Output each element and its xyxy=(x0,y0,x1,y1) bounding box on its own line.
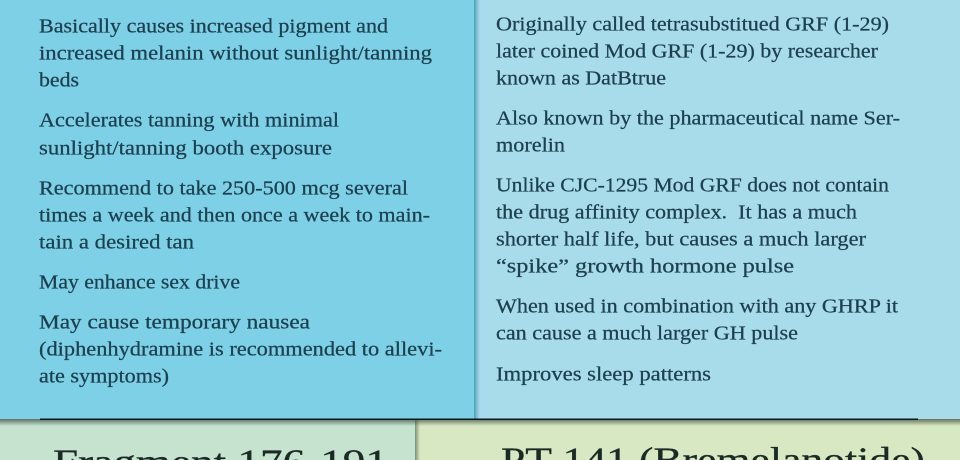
text block: Melanotan facts xyxy=(39,16,442,388)
text block: Mod GRF facts: Also known by the pharmaceutical name Ser- xyxy=(496,108,900,130)
panel: Mod GRF (1-29) xyxy=(476,0,960,419)
text block: Melanotan facts: increased melanin without sunlight/tanning xyxy=(39,44,432,64)
text block: Melanotan facts: Recommend to take 250-500 mcg several xyxy=(39,178,409,200)
text block: Mod GRF facts: later coined Mod GRF (1-29) by researcher xyxy=(496,42,879,62)
panel: Melanotan xyxy=(0,0,480,419)
text block: Melanotan facts: May cause temporary nausea xyxy=(39,312,310,334)
text block: Mod GRF facts: the drug affinity complex. It has a much xyxy=(496,202,857,224)
text block: Mod GRF facts xyxy=(496,14,900,386)
text block: Mod GRF facts: shorter half life, but causes a much larger xyxy=(496,230,867,250)
text block: Melanotan facts: Basically causes increased pigment and xyxy=(39,16,388,38)
text block: Mod GRF facts: known as DatBtrue xyxy=(496,68,666,90)
text block: Melanotan facts: (diphenhydramine is recommended to allevi- xyxy=(39,340,442,360)
text block: Mod GRF facts: Improves sleep patterns xyxy=(496,364,711,386)
text block: Melanotan facts: Accelerates tanning with minimal xyxy=(39,110,340,132)
text block: Melanotan facts: May enhance sex drive xyxy=(39,272,240,294)
panel: PT-141 (Bremelanotide) xyxy=(415,418,960,460)
text block: Mod GRF facts: Unlike CJC-1295 Mod GRF does not contain xyxy=(496,176,889,196)
text block: Melanotan facts: sunlight/tanning booth exposure xyxy=(39,138,332,160)
text block: Mod GRF facts: When used in combination with any GHRP it xyxy=(496,296,899,318)
text block: Mod GRF facts: can cause a much larger GH pulse xyxy=(496,324,798,344)
text block: Melanotan facts: tain a desired tan xyxy=(39,232,194,254)
text block: Mod GRF facts: Originally called tetrasubstitued GRF (1-29) xyxy=(496,14,889,36)
panel: Fragment 176-191 xyxy=(0,418,416,460)
text block: Melanotan facts: times a week and then once a week to main- xyxy=(39,206,430,226)
text block: Mod GRF facts: morelin xyxy=(496,136,565,156)
text block: Melanotan facts: beds xyxy=(39,70,79,92)
text block: Mod GRF facts: “spike” growth hormone pulse xyxy=(496,256,794,278)
text block: Melanotan facts: ate symptoms) xyxy=(39,366,169,388)
